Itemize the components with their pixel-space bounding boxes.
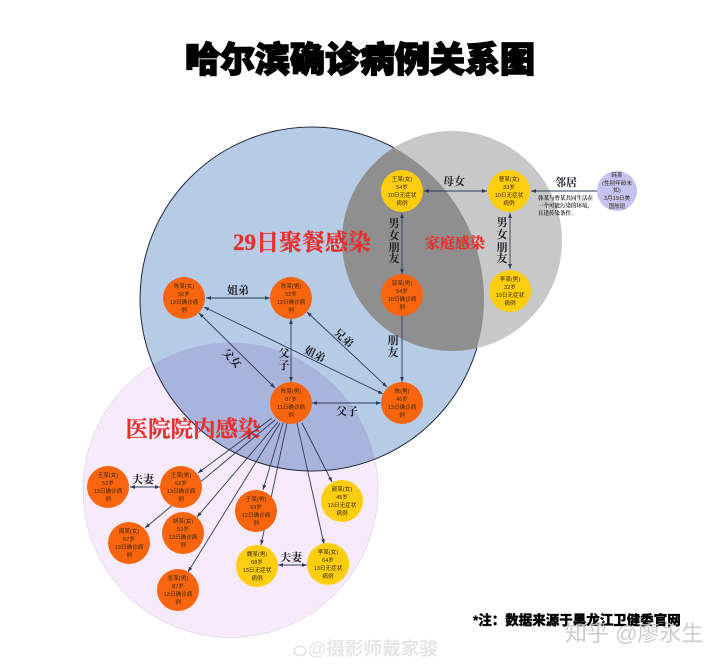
node: 陈某 female 56: 例 (181, 306, 187, 314)
node: 周某 female 57: 13日确诊病 (115, 543, 144, 551)
watermark: weibo: @摄影师戴家骏 (308, 638, 438, 659)
label: family infection: 家庭感染 (425, 234, 485, 252)
circle: hospital infection (83, 342, 378, 638)
node: 曹某 female 33: 33岁 (503, 183, 515, 191)
relationship labels: 女 (388, 228, 400, 242)
relationship labels: 父 (278, 347, 290, 360)
node: 王某 female 52 (87, 466, 129, 508)
node: 王某 male 52: 13日确诊病 (167, 487, 196, 495)
relationship labels: 子 (278, 359, 290, 372)
relationship labels (132, 174, 577, 564)
node: 张某 male 87: 87岁 (172, 582, 184, 590)
relationship labels: 友 (388, 251, 400, 265)
node: 郭某 male 54: 10日确诊病 (388, 295, 417, 303)
node: 魏某 male 68: 13日无症状 (243, 566, 272, 574)
node: 陈某 male 52: 52岁 (285, 290, 297, 298)
node: 王某 female 52: 52岁 (102, 479, 114, 487)
relationship labels: 朋 (388, 334, 398, 347)
node: 陈某 male 87: 陈某(男) (281, 387, 301, 395)
node: 胡某 female 53 (162, 512, 204, 554)
relationship labels: 友 (388, 345, 398, 359)
node: 王某 female 52: 13日确诊病 (94, 487, 123, 495)
node: 颜某 female 45: 13日无症状 (328, 501, 357, 509)
node: 李某 male 32: 10日无症状 (496, 291, 525, 299)
node: 魏某 male 68: 魏某(男) (247, 550, 267, 558)
node: 李某 female 64: 64岁 (322, 556, 334, 564)
node: 颜某 female 45: 45岁 (336, 493, 348, 501)
node: 周某 female 57 (108, 522, 150, 564)
relationship labels: 朋 (388, 241, 400, 254)
node: 王某 female 54: 病例 (396, 199, 408, 207)
node: 于某 male 59: 于某(男) (246, 496, 266, 503)
node: 郭某 male 54: 54岁 (396, 287, 408, 295)
circle: dinner infection (140, 127, 484, 471)
node: 曹某 female 33: 病例 (503, 199, 515, 207)
node: 曹某 female 33 (488, 170, 530, 212)
node: 陈某 male 87 (270, 382, 312, 424)
source note: *注：数据来源于黑龙江卫健委官网 (473, 612, 681, 628)
node: 张某 male 87 (157, 569, 199, 611)
relationship labels: 父子 (336, 405, 358, 418)
relationship labels: 夫妻 (280, 550, 303, 564)
node: 李某 female 64: 13日无症状 (314, 564, 343, 572)
node: 陈 male 46 (381, 382, 423, 424)
node: 胡某 female 53: 53岁 (177, 525, 189, 533)
overlap: dinner and family (342, 148, 484, 351)
node: 王某 male 52: 52岁 (175, 479, 187, 487)
node: 曹某 female 33: 10日无症状 (495, 191, 524, 199)
node: 李某 female 64 (307, 543, 349, 585)
node: 王某 female 54: 王某(女) (392, 175, 412, 183)
relationship labels: 母女 (443, 174, 466, 188)
circle: family infection (342, 131, 562, 351)
neighbor note: 且逢传染条件。 (538, 209, 577, 217)
node: 陈某 male 52: 13日确诊病 (277, 298, 306, 306)
connection lines (130, 191, 597, 572)
node: 李某 female 64: 李某(女) (318, 548, 338, 556)
node: 魏某 male 68: 68岁 (251, 558, 263, 566)
node: 胡某 female 53: 13日确诊病 (169, 533, 198, 541)
node: 郭某 male 54: 郭某(男) (392, 279, 412, 287)
node: 陈某 male 87: 例 (288, 411, 294, 419)
title: 哈尔滨确诊病例关系图 (185, 41, 535, 80)
node: 张某 male 87: 例 (175, 598, 181, 606)
node: 李某 male 32 (489, 270, 531, 312)
relationship labels: 友 (496, 251, 508, 265)
relationship labels: 父女 (219, 345, 245, 371)
node: 胡某 female 53: 胡某(女) (173, 517, 193, 525)
node: 陈某 male 87: 87岁 (285, 395, 297, 403)
node: 王某 female 52: 例 (105, 495, 111, 503)
node: 韩某: 知) (613, 186, 621, 194)
node: 陈 male 46: 13日确诊病 (388, 403, 417, 411)
node: 韩某: 3月19日美 (604, 194, 630, 202)
node: 颜某 female 45 (321, 480, 363, 522)
relationship labels: 朋 (496, 241, 508, 254)
node: 于某 male 59: 12日确诊病 (242, 511, 271, 519)
relationship labels: 男 (388, 217, 400, 230)
node: 王某 male 52: 王某(男) (171, 472, 191, 479)
node: 王某 male 52: 例 (178, 495, 184, 503)
node: 陈 male 46: 例 (399, 411, 405, 419)
label: 29 dinner infection: 29日聚餐感染 (233, 229, 371, 255)
node: 李某 male 32: 病例 (504, 299, 516, 307)
node: 王某 male 52 (160, 466, 202, 508)
node: 于某 male 59: 59岁 (250, 503, 262, 511)
overlap: dinner and hospital (154, 342, 374, 470)
node: 陈某 male 52 (270, 277, 312, 319)
node: 于某 male 59 (235, 490, 277, 532)
relationship labels: 姐弟 (302, 343, 328, 365)
node: 王某 female 52: 王某(女) (98, 471, 118, 479)
venn diagram circles (83, 127, 562, 638)
node: 韩某: (性别年龄未 (602, 179, 632, 187)
neighbor note: 韩某与曹某共同生活在 (538, 194, 594, 202)
node: 陈某 female 56: 56岁 (178, 290, 190, 298)
node: 于某 male 59: 例 (253, 519, 259, 527)
relationship labels: 兄弟 (331, 325, 357, 351)
node: 陈某 male 52: 例 (288, 306, 294, 314)
node: 陈某 male 52: 陈某(男) (281, 282, 301, 290)
node: 李某 male 32: 李某(男) (500, 275, 520, 283)
node: 陈 male 46: 46岁 (396, 395, 408, 403)
node: 韩某 (597, 171, 637, 211)
node: 周某 female 57: 例 (126, 551, 132, 559)
node: 李某 male 32: 32岁 (504, 283, 516, 291)
node: 陈某 female 56: 13日确诊病 (170, 298, 199, 306)
node: 颜某 female 45: 病例 (336, 509, 348, 517)
relationship labels: 姐弟 (227, 283, 249, 297)
node: 曹某 female 33: 曹某(女) (499, 175, 519, 183)
watermark: zhihu: 知乎 @廖永生 (565, 621, 703, 646)
node: 颜某 female 45: 颜某(女) (332, 485, 352, 493)
node: 韩某: 国航班 (609, 202, 626, 210)
relationship labels: 夫妻 (132, 472, 155, 486)
outline: dinner infection (140, 127, 484, 471)
label: hospital infection: 医院院内感染 (125, 416, 261, 442)
node: 魏某 male 68: 病例 (251, 574, 263, 582)
node: 王某 female 54 (381, 170, 423, 212)
node: 郭某 male 54 (381, 274, 423, 316)
neighbor note: 一个可能污染的环境， (538, 202, 593, 210)
node: 魏某 male 68 (236, 545, 278, 587)
node: 陈某 female 56: 陈某(女) (174, 282, 194, 290)
node: 陈某 female 56 (163, 277, 205, 319)
node: 王某 female 54: 54岁 (396, 183, 408, 191)
node: 周某 female 57: 57岁 (123, 535, 135, 543)
node: 陈某 male 87: 11日确诊病 (277, 403, 305, 411)
node: 张某 male 87: 张某(男) (168, 574, 188, 582)
relationship labels: 邻居 (555, 175, 577, 189)
node: 王某 female 54: 10日无症状 (388, 191, 417, 199)
node: 周某 female 57: 周某(女) (119, 527, 139, 535)
node: 李某 female 64: 病例 (322, 572, 334, 580)
node: 胡某 female 53: 例 (180, 541, 186, 549)
relationship labels: 女 (496, 227, 508, 241)
node: 韩某: 韩某 (611, 171, 623, 179)
relationship labels: 男 (496, 216, 508, 229)
node: 张某 male 87: 12日确诊病 (164, 590, 193, 598)
node: 郭某 male 54: 例 (399, 303, 405, 311)
icon: weibo (294, 646, 306, 656)
node: 陈 male 46: 陈(男) (395, 387, 410, 395)
